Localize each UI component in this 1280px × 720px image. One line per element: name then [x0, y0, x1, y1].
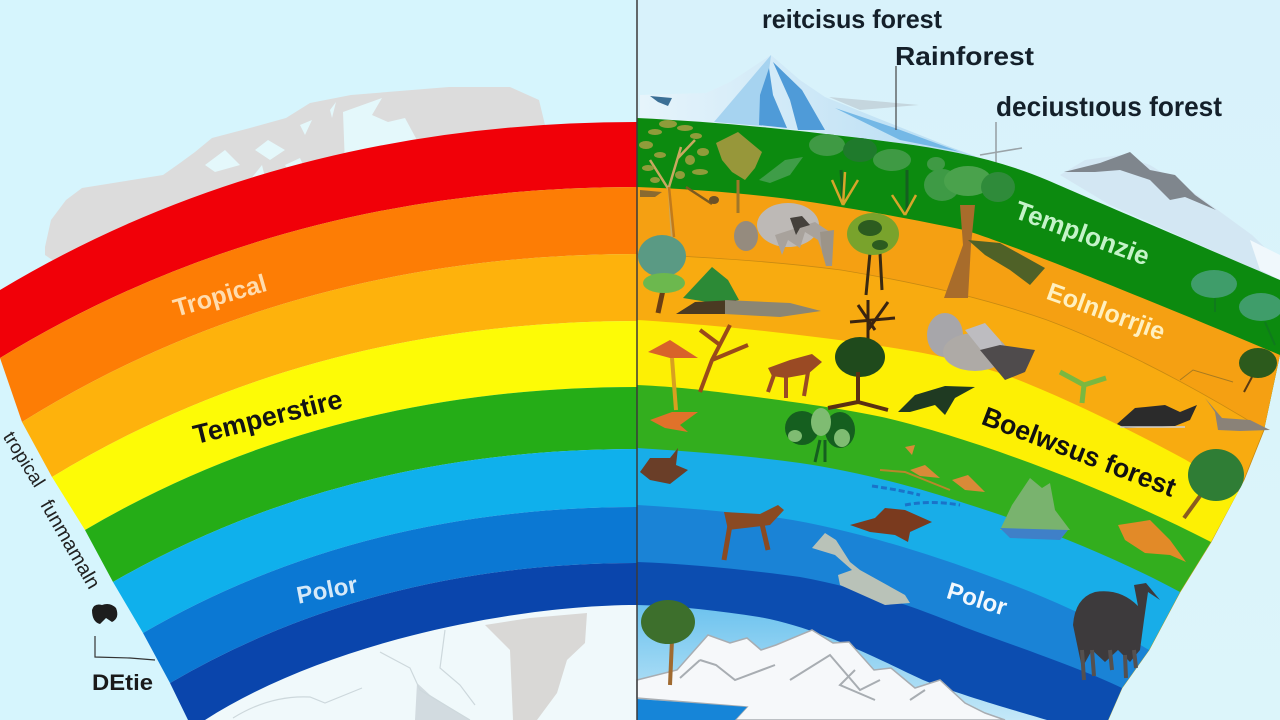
- world map: bottom left: [233, 613, 587, 720]
- label: Tropical: Tropical: [170, 269, 270, 323]
- icon: blue ripples: [872, 486, 960, 505]
- background left: [0, 0, 637, 720]
- icon: large acacia tree: [924, 166, 1015, 298]
- label: Temperate green: Templonzie: [1011, 195, 1154, 271]
- icon: elephant: [734, 203, 834, 266]
- band: light blue: [113, 449, 637, 633]
- bracket leader: [95, 636, 155, 660]
- band: red: [0, 122, 637, 358]
- mountain: top snow peak: [640, 55, 977, 157]
- band: green: [637, 385, 1211, 720]
- band: navy: [170, 563, 637, 720]
- world map: top left: [45, 87, 545, 272]
- icon: olive tree 1: [639, 120, 719, 237]
- icon: teal tree: [638, 235, 686, 313]
- icon: orange lizard: [650, 412, 698, 432]
- icon: dark patch: [968, 240, 1045, 285]
- mountain: right grey: [1060, 152, 1280, 281]
- band: green: [85, 387, 637, 582]
- band: yellow: [52, 321, 637, 530]
- label: deciduous forest: deciustıous forest: [996, 91, 1222, 122]
- icon: faint ridge: [1180, 370, 1233, 382]
- icon: orange lizards stream: [880, 445, 985, 492]
- center divider: [636, 0, 638, 720]
- label: amber band: Eolnlorrjie: [1043, 278, 1169, 346]
- icon: brown creature: [640, 448, 688, 484]
- icon: small canopy trees: [809, 134, 945, 215]
- icon: fox: [768, 354, 822, 398]
- icon: green mound: [683, 267, 739, 304]
- band: blue: [143, 507, 637, 683]
- biome bands: right half: [637, 118, 1280, 720]
- icon: gravel patch: [725, 300, 821, 317]
- band: orange: [0, 187, 637, 422]
- icon: snow mountains: [637, 630, 1005, 720]
- icon: turtle: [1117, 405, 1197, 428]
- icon: raccoon: [850, 508, 932, 542]
- leader: rainforest: [895, 66, 897, 130]
- icon: dark bush cluster: [785, 408, 855, 462]
- icon: orange mushroom tree: [648, 340, 698, 410]
- leader: deciduous: [980, 122, 1022, 165]
- label: Polar left: Polor: [294, 571, 360, 610]
- band: blue: [637, 505, 1149, 720]
- icon: grey bone: [812, 533, 910, 605]
- icon: dark oak: [828, 337, 888, 410]
- icon: green sprig: [1060, 372, 1106, 403]
- background right: [637, 0, 1280, 720]
- icon: black blob: [92, 604, 117, 624]
- icon: brown llama: [724, 505, 784, 560]
- band: amber: [637, 254, 1264, 720]
- label: Temperature: Temperstire: [190, 384, 345, 450]
- icon: green hill: [1000, 478, 1070, 540]
- icon: green sapling tree: [847, 213, 899, 295]
- polar sky: [637, 605, 1047, 720]
- band: navy: [637, 562, 1122, 720]
- label: Detie: DEtie: [92, 670, 153, 695]
- icon: orange dinosaur: [1118, 520, 1186, 562]
- icon: leaf streak: [759, 157, 803, 183]
- label: top forest: reitcisus forest: [762, 4, 942, 34]
- icon: ostrich: [1073, 583, 1160, 680]
- icon: mound base: [676, 300, 738, 314]
- band: yellow: [637, 320, 1238, 720]
- band: orange: [637, 187, 1280, 720]
- label: Rainforest: Rainforest: [895, 41, 1034, 71]
- icon: dark tree right: [1239, 348, 1277, 392]
- icon: olive tree 2: [716, 132, 762, 213]
- band: light blue: [637, 448, 1180, 720]
- band: amber: [22, 254, 637, 477]
- band: forest green: [637, 118, 1280, 720]
- icon: right green trees: [1191, 270, 1280, 345]
- icon: lizard: [1205, 398, 1270, 431]
- icon: polar pine tree: [641, 600, 695, 685]
- icon: bare red branches: [700, 325, 748, 392]
- label: Polar right: Polor: [944, 578, 1010, 621]
- icon: rhino: [927, 313, 1035, 380]
- icon: thorn sprig: [850, 300, 895, 345]
- label: Boreal forest: Boelwsus forest: [978, 401, 1180, 503]
- icon: right leafy tree: [1184, 449, 1244, 518]
- side label: fundamental: funmamaln: [36, 496, 104, 593]
- climate arc bands: left half: [0, 122, 637, 720]
- land under arc: bottom left: [205, 605, 637, 720]
- icon: crow: [898, 386, 975, 415]
